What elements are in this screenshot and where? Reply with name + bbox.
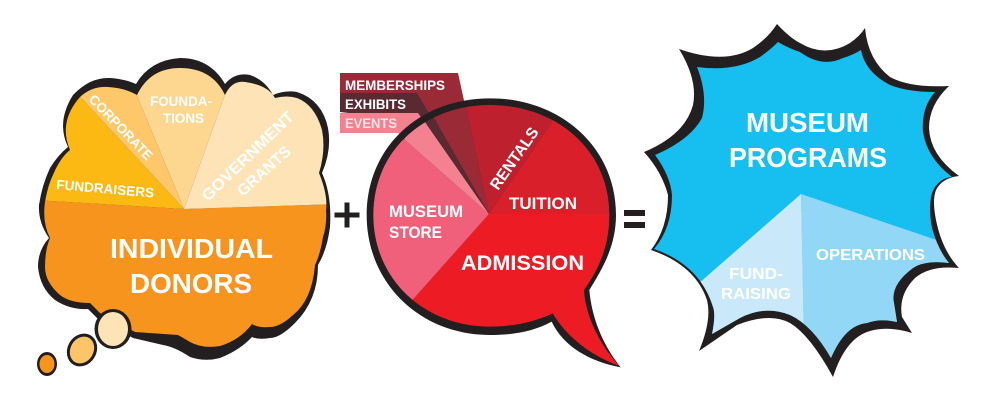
segment: fundraising — [700, 194, 804, 334]
segment: corporate — [80, 86, 184, 209]
panel: thought cloud funding sources — [37, 58, 330, 376]
panel: starburst museum programs — [644, 24, 959, 377]
label: individual donors: INDIVIDUAL — [110, 233, 273, 264]
label: fundraisers: FUNDRAISERS — [56, 177, 155, 201]
cloud black outline — [38, 58, 330, 360]
label: museum: MUSEUM — [389, 203, 463, 221]
label: programs: PROGRAMS — [729, 142, 887, 173]
segment: admission — [412, 214, 620, 366]
flag: memberships — [340, 73, 489, 214]
segment: museum store — [373, 139, 489, 300]
label: corporate: CORPORATE — [86, 92, 156, 163]
thought bubble: large — [94, 309, 132, 349]
flag: exhibits — [340, 93, 489, 214]
label: operations: OPERATIONS — [816, 247, 925, 264]
equals sign — [624, 210, 645, 228]
starburst black outline — [644, 24, 959, 377]
speech bubble black outline — [367, 98, 621, 367]
thought bubble: small — [37, 352, 57, 376]
label: foundations line 1: FOUNDA- — [150, 94, 212, 109]
label: fund: FUND- — [729, 266, 783, 283]
segment: events — [404, 122, 489, 214]
segment: exhibits — [425, 118, 488, 212]
label: exhibits: EXHIBITS — [345, 96, 406, 112]
label: grants: GRANTS — [234, 143, 295, 200]
label: government: GOVERNMENT — [199, 108, 298, 205]
segment: rentals — [466, 105, 552, 214]
segment: tuition — [489, 120, 610, 214]
plus sign — [334, 202, 360, 228]
segment: individual donors — [44, 200, 326, 347]
label: store: STORE — [389, 224, 442, 242]
flag: events — [340, 113, 489, 214]
starburst pie chart — [654, 42, 952, 358]
label: museum: MUSEUM — [746, 107, 869, 138]
segment: fundraisers — [45, 96, 184, 209]
segment: operations — [801, 194, 949, 358]
thought bubble: medium — [61, 328, 103, 372]
cloud pie chart — [44, 68, 326, 347]
segment: government grants — [184, 82, 326, 209]
label: tuition: TUITION — [509, 195, 577, 213]
label: donors: DONORS — [130, 268, 252, 299]
segment: museum programs — [654, 42, 952, 358]
label: events: EVENTS — [345, 115, 397, 131]
label: foundations line 2: TIONS — [163, 111, 204, 126]
label: memberships: MEMBERSHIPS — [345, 77, 445, 93]
segment: memberships — [434, 107, 489, 214]
label: admission: ADMISSION — [461, 252, 584, 275]
speech pie chart — [373, 105, 620, 366]
label: raising: RAISING — [721, 286, 791, 303]
segment: foundations — [136, 68, 226, 209]
panel: speech bubble earned income — [340, 73, 630, 385]
label: rentals: RENTALS — [487, 124, 543, 193]
